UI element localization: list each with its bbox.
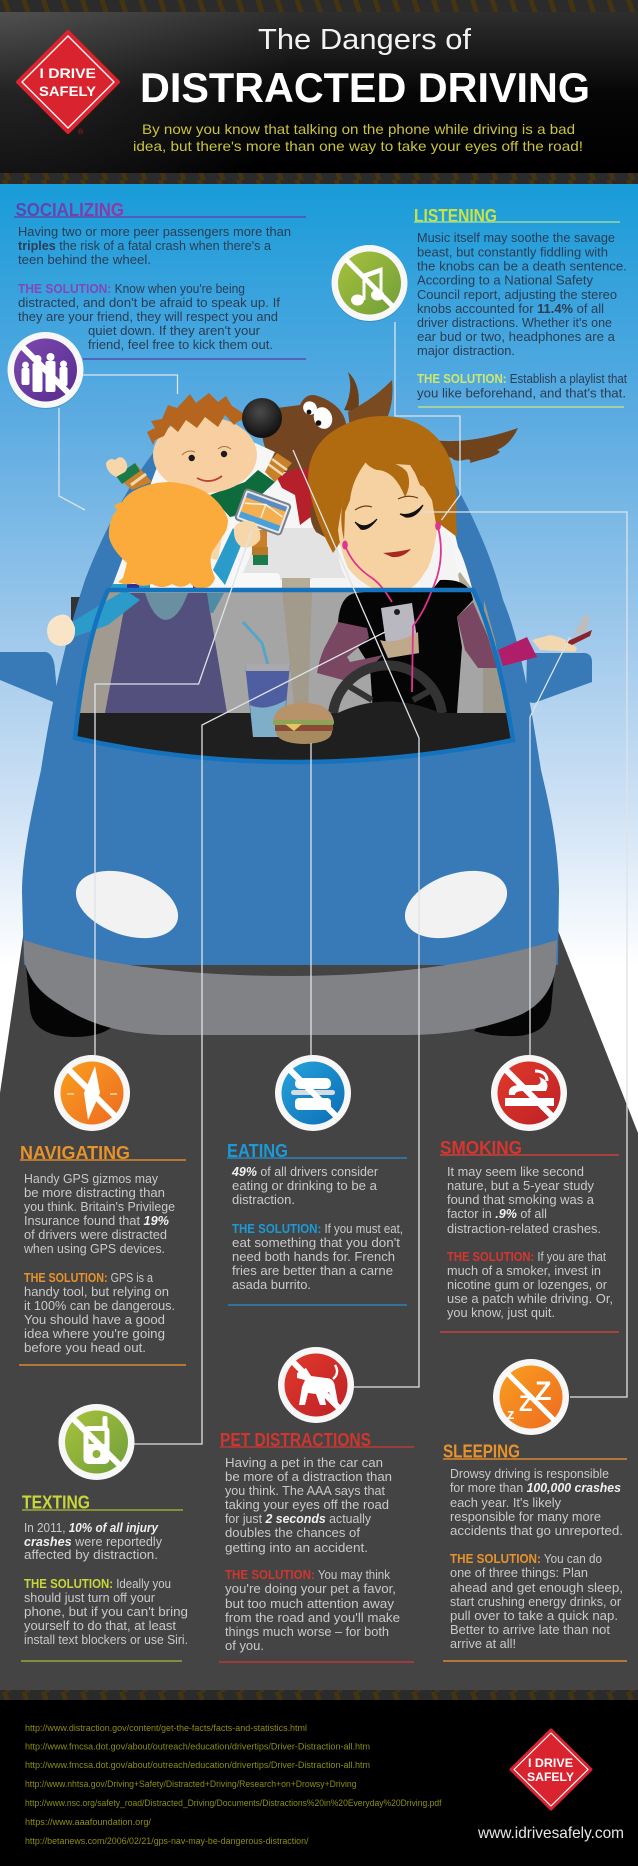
eating text: asada burrito. — [232, 1278, 311, 1292]
socializing text: quiet down. If they aren't your — [88, 324, 260, 338]
icon: no eating — [275, 1055, 351, 1131]
sleeping text: start crushing energy drinks, or — [450, 1595, 621, 1609]
navigating text: before you head out. — [24, 1341, 146, 1355]
navigating text: handy tool, but relying on — [24, 1285, 169, 1299]
sleeping text: accidents that go unreported. — [450, 1524, 623, 1538]
source links — [25, 1723, 442, 1846]
intro text: By now you know that talking on the phone while driving is a bad — [142, 121, 575, 137]
passenger body — [105, 593, 227, 713]
eating text: fries are better than a carne — [232, 1264, 393, 1278]
panel: listening — [332, 206, 627, 407]
texting text — [24, 1521, 188, 1647]
passenger hair — [109, 482, 228, 588]
texting text: install text blockers or use Siri. — [24, 1633, 188, 1647]
phone and hand — [381, 603, 419, 658]
socializing text: distracted, and don't be afraid to speak up. If — [18, 296, 281, 310]
footer — [0, 1690, 638, 1866]
smoking text: you know, just quit. — [447, 1306, 555, 1320]
sleeping text: Better to arrive late than not — [450, 1623, 611, 1637]
eating text: 49% of all drivers consider — [231, 1165, 378, 1179]
icon: no texting — [58, 1404, 134, 1480]
sleeping text: Drowsy driving is responsible — [450, 1467, 609, 1481]
heading: sleeping: SLEEPING — [443, 1442, 520, 1462]
smoking text: THE SOLUTION: If you are that — [447, 1250, 606, 1264]
navigating text: Insurance found that 19% — [24, 1214, 169, 1228]
burger — [273, 703, 334, 744]
smoking text: nature, but a 5-year study — [447, 1179, 595, 1193]
navigating text: Handy GPS gizmos may — [24, 1172, 159, 1186]
windshield glass — [75, 590, 513, 762]
sleeping text — [450, 1467, 623, 1651]
callout leader lines — [59, 322, 627, 1444]
logo: I Drive Safely: ® — [78, 128, 84, 136]
steering wheel — [333, 665, 442, 713]
texting text: phone, but if you can't bring — [24, 1605, 188, 1619]
socializing text: Having two or more peer passengers more than — [18, 225, 291, 239]
pet distractions text: for just 2 seconds actually — [225, 1512, 372, 1526]
icon: no sleeping: z — [507, 1406, 514, 1423]
footer logo: I DRIVE — [528, 1756, 573, 1770]
rear seat — [240, 528, 350, 580]
driver face — [338, 462, 437, 593]
smoking text: It may seem like second — [447, 1165, 584, 1179]
windshield frame — [75, 590, 513, 762]
wheels — [26, 965, 555, 1037]
eating text: eat something that you don't — [232, 1236, 401, 1250]
icon: no sleeping — [493, 1359, 569, 1435]
passenger left arm and hand — [72, 590, 140, 637]
icon: no pets — [278, 1347, 354, 1423]
panel: pet distractions — [219, 1347, 414, 1662]
source links: http://www.distraction.gov/content/get-the-facts/facts-and-statistics.html — [25, 1723, 307, 1733]
sleeping text: THE SOLUTION: You can do — [450, 1552, 602, 1566]
navigating text — [23, 1172, 175, 1355]
boy left sleeve and hand — [106, 457, 152, 490]
earbud cables — [345, 527, 441, 692]
listening text: knobs accounted for 11.4% of all — [417, 302, 604, 316]
navigating text: you think. Britain's Privilege — [24, 1200, 175, 1214]
bumper — [24, 940, 557, 1035]
intro text — [133, 121, 583, 154]
side mirrors — [0, 652, 592, 704]
smoking text: nicotine gum or lozenges, or — [447, 1278, 607, 1292]
pet distractions text: Having a pet in the car can — [225, 1456, 383, 1470]
icon: no passengers — [8, 332, 84, 409]
passenger right arm — [208, 515, 248, 580]
boy — [106, 393, 292, 517]
pet distractions text: but too much attention away — [225, 1597, 395, 1611]
headrests — [230, 572, 473, 590]
pet distractions text: getting into an accident. — [225, 1541, 368, 1555]
passenger hand — [234, 521, 260, 548]
headlights — [67, 858, 516, 951]
sleeping text: each year. It's likely — [450, 1496, 562, 1510]
logo: I Drive Safely: I DRIVE — [40, 65, 96, 81]
smoking text: much of a smoker, invest in — [447, 1264, 601, 1278]
socializing text: triples the risk of a fatal crash when there's a — [18, 239, 271, 253]
smoking text: found that smoking was a — [447, 1193, 594, 1207]
dashboard — [75, 713, 513, 762]
heading: eating: EATING — [227, 1141, 288, 1161]
pet distractions text: taking your eyes off the road — [225, 1498, 389, 1512]
white scarf blobs — [338, 545, 385, 590]
eating text: eating or drinking to be a — [232, 1179, 377, 1193]
navigating text: be more distracting than — [24, 1186, 165, 1200]
sleeping text: responsible for many more — [450, 1510, 601, 1524]
texting text: should just turn off your — [24, 1591, 155, 1605]
road — [0, 928, 638, 1692]
smoking text — [447, 1165, 613, 1320]
panel: navigating — [19, 1055, 186, 1365]
source links: http://www.nhtsa.gov/Driving+Safety/Distracted+Driving/Research+on+Drowsy+Driving — [25, 1779, 356, 1789]
logo: I Drive Safely: SAFELY — [39, 83, 97, 99]
panel: smoking — [440, 1055, 619, 1332]
icon: no smoking — [491, 1055, 567, 1131]
listening text — [417, 231, 627, 401]
door frame — [71, 597, 101, 707]
footer logo: SAFELY — [527, 1770, 574, 1784]
pet distractions text: you're doing your pet a favor, — [225, 1582, 396, 1596]
pet distractions text: from the road and you'll make — [225, 1611, 400, 1625]
pet distractions text: things much worse – for both — [225, 1625, 389, 1639]
texting text: THE SOLUTION: Ideally you — [24, 1577, 171, 1591]
eating text: distraction. — [232, 1193, 295, 1207]
listening text: Council report, adjusting the stereo — [417, 288, 617, 302]
drink cup — [243, 622, 290, 737]
texting text: crashes were reportedly — [24, 1535, 163, 1549]
driver — [308, 416, 592, 715]
sleeping text: one of three things: Plan — [450, 1566, 588, 1580]
dog — [262, 372, 518, 540]
panel: socializing — [8, 200, 306, 409]
icon: no sleeping: Z — [519, 1391, 532, 1416]
listening text: driver distractions. Whether it's one — [417, 316, 612, 330]
navigating text: idea where you're going — [24, 1327, 165, 1341]
sleeping text: for more than 100,000 crashes — [450, 1481, 621, 1495]
sleeping text: pull over to take a quick nap. — [450, 1609, 618, 1623]
driver right arm and cigarette — [498, 637, 537, 666]
navigating text: THE SOLUTION: GPS is a — [24, 1271, 153, 1285]
icon: no sleeping: Z — [535, 1376, 552, 1406]
listening text: ear bud or two, headphones are a — [417, 330, 615, 344]
sky background — [0, 184, 638, 1004]
driver hair — [308, 416, 457, 553]
sleeping text: ahead and get enough sleep, — [450, 1581, 623, 1595]
driver sleeves — [317, 622, 383, 680]
source links: http://www.nsc.org/safety_road/Distracted_Driving/Documents/Distractions%20in%20Everyday%20Driving.pdf — [25, 1798, 442, 1808]
listening text: THE SOLUTION: Establish a playlist that — [417, 372, 627, 386]
cabin interior — [110, 467, 473, 592]
heading: socializing: SOCIALIZING — [16, 200, 124, 220]
texting text: yourself to do that, at least — [24, 1619, 177, 1633]
interior side panels — [78, 590, 508, 713]
panel: sleeping — [443, 1359, 627, 1661]
heading: navigating: NAVIGATING — [20, 1143, 130, 1163]
heading: listening: LISTENING — [414, 206, 497, 226]
website url: www.idrivesafely.com — [477, 1825, 624, 1842]
source links: http://betanews.com/2006/02/21/gps-nav-may-be-dangerous-distraction/ — [25, 1836, 309, 1846]
boy right sleeve — [263, 453, 292, 482]
lower sleeve stripes — [252, 530, 268, 565]
pet distractions text: of you. — [225, 1639, 264, 1653]
driver torso — [338, 580, 473, 713]
listening text: Music itself may soothe the savage — [417, 231, 615, 245]
passenger — [47, 482, 248, 713]
driver fringe — [365, 461, 409, 497]
texting text: affected by distraction. — [24, 1548, 158, 1562]
pet distractions text: doubles the chances of — [225, 1526, 361, 1540]
title line two: DISTRACTED DRIVING — [140, 64, 590, 111]
logo: I Drive Safely — [18, 32, 118, 136]
smoking text: distraction-related crashes. — [447, 1222, 601, 1236]
pet distractions text: be more of a distraction than — [225, 1470, 392, 1484]
smoking text: factor in .9% of all — [447, 1207, 547, 1221]
sleeping text: arrive at all! — [450, 1637, 516, 1651]
pet distractions text: THE SOLUTION: You may think — [225, 1568, 391, 1582]
navigating text: of drivers were distracted — [24, 1228, 167, 1242]
smoking text: use a patch while driving. Or, — [447, 1292, 613, 1306]
heading: pet distractions: PET DISTRACTIONS — [220, 1430, 371, 1450]
listening text: According to a National Safety — [417, 274, 594, 288]
socializing text — [18, 225, 291, 352]
listening text: major distraction. — [417, 344, 515, 358]
source links: http://www.fmcsa.dot.gov/about/outreach/education/drivertips/Driver-Distraction-all.htm — [25, 1760, 370, 1770]
source links: https://www.aaafoundation.org/ — [25, 1817, 151, 1827]
panel: texting — [21, 1404, 188, 1661]
pet distractions text: you think. The AAA says that — [225, 1484, 386, 1498]
eating text — [231, 1165, 403, 1292]
socializing text: they are your friend, they will respect you and — [18, 310, 278, 324]
eating text: need both hands for. French — [232, 1250, 395, 1264]
title line one: The Dangers of — [258, 24, 472, 56]
listening text: you like beforehand, and that's that. — [417, 387, 626, 401]
footer logo — [511, 1730, 591, 1809]
GPS device — [235, 489, 291, 535]
navigating text: it 100% can be dangerous. — [24, 1299, 175, 1313]
icon: no music — [332, 245, 408, 322]
texting text: In 2011, 10% of all injury — [24, 1521, 159, 1535]
navigating text: You should have a good — [24, 1313, 165, 1327]
heading: smoking: SMOKING — [440, 1138, 522, 1158]
icon: no GPS compass — [54, 1055, 130, 1131]
heading: texting: TEXTING — [22, 1492, 90, 1512]
listening text: beast, but constantly fiddling with — [417, 246, 608, 260]
panel: eating — [227, 1055, 407, 1305]
socializing text: THE SOLUTION: Know when you're being — [18, 282, 245, 296]
listening text: the knobs can be a death sentence. — [417, 260, 627, 274]
car body — [22, 453, 559, 965]
socializing text: friend, feel free to kick them out. — [88, 338, 273, 352]
intro text: idea, but there's more than one way to take your eyes off the road! — [133, 138, 583, 154]
eating text: THE SOLUTION: If you must eat, — [232, 1222, 403, 1236]
pet distractions text — [225, 1456, 400, 1653]
header banner — [0, 0, 638, 184]
illustration: car with distracted occupants — [0, 322, 627, 1444]
boy neck collar — [240, 442, 275, 490]
socializing text: teen behind the wheel. — [18, 253, 151, 267]
navigating text: when using GPS devices. — [23, 1242, 165, 1256]
dog nose — [242, 398, 282, 438]
source links: http://www.fmcsa.dot.gov/about/outreach/education/drivertips/Driver-Distraction-all.htm — [25, 1742, 370, 1752]
